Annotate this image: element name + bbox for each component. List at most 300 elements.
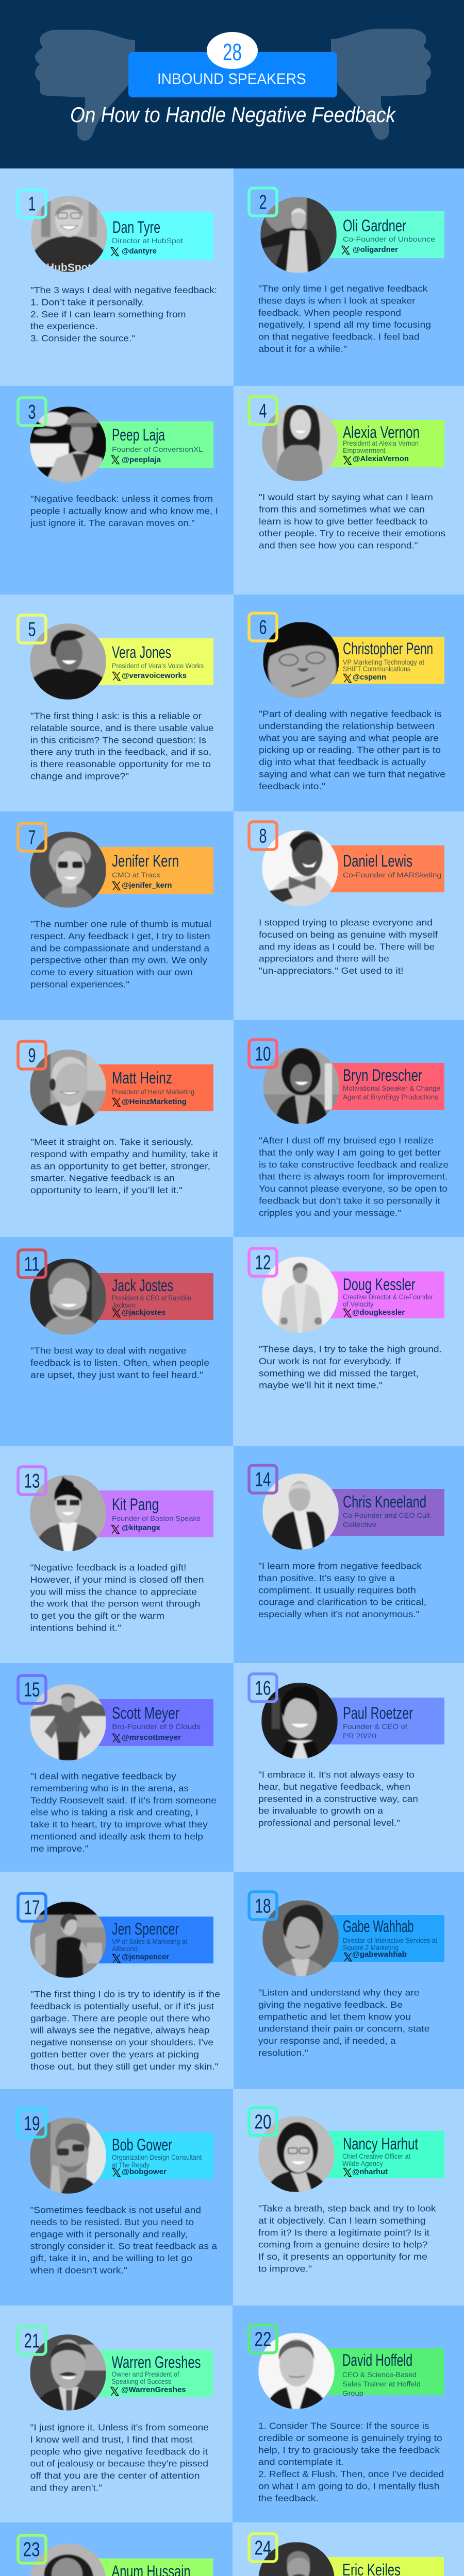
panel: card 1 Dan Tyre bbox=[0, 168, 234, 386]
panel: card 11 Jack Jostes bbox=[0, 1237, 234, 1446]
quote: me improve." bbox=[30, 1843, 89, 1854]
quote: people I actually know and who know me, I bbox=[30, 505, 218, 516]
quote: those out, but they still get under my skin." bbox=[30, 2061, 219, 2072]
quote: feedback into." bbox=[259, 781, 325, 791]
panel: card 15 Scott Meyer bbox=[0, 1663, 234, 1872]
job title: Bro-Founder of 9 Clouds bbox=[112, 1722, 201, 1731]
number badge: 13 bbox=[24, 1470, 40, 1492]
handle: @bobgower bbox=[122, 2167, 167, 2176]
portrait bbox=[263, 622, 339, 698]
job title: Founder of Boston Speaks bbox=[112, 1514, 201, 1522]
quote: on what I am going to do, I mentally flush bbox=[258, 2481, 439, 2492]
panel: card 12 Doug Kessler bbox=[233, 1237, 464, 1446]
quote bbox=[30, 1346, 209, 1380]
quote: as an opportunity to get better, stronger, bbox=[30, 1161, 210, 1171]
quote: "Sometimes feedback is not useful and bbox=[30, 2205, 201, 2215]
number badge: 12 bbox=[255, 1252, 271, 1274]
quote: take it to heart, try to improve what they bbox=[30, 1819, 208, 1829]
profile banner bbox=[325, 211, 444, 258]
quote: the experience. bbox=[30, 321, 98, 331]
job title bbox=[343, 1936, 437, 1952]
quote: when it doesn't work." bbox=[29, 2265, 127, 2275]
profile banner bbox=[322, 2348, 444, 2395]
job title bbox=[343, 1511, 430, 1529]
number badge: 22 bbox=[255, 2329, 271, 2350]
quote bbox=[258, 1561, 426, 1619]
portrait bbox=[30, 2544, 106, 2576]
name: Gabe Wahhab bbox=[343, 1917, 413, 1936]
name: Bob Gower bbox=[112, 2136, 172, 2154]
icon: X logo bbox=[343, 674, 351, 682]
quote: come to every situation with our own bbox=[30, 967, 193, 977]
number badge: 19 bbox=[24, 2112, 40, 2135]
name: Jen Spencer bbox=[112, 1920, 179, 1938]
number badge bbox=[249, 1040, 277, 1067]
quote: understanding the relationship between bbox=[259, 721, 435, 731]
number badge bbox=[249, 822, 277, 850]
portrait bbox=[31, 196, 107, 272]
quote: feedback. When people respond bbox=[258, 308, 401, 318]
number badge: 23 bbox=[23, 2539, 40, 2561]
quote: at it objectively. Can I learn something bbox=[258, 2215, 426, 2226]
quote: engage with it personally and really, bbox=[30, 2229, 188, 2239]
icon: thumbs down left bbox=[35, 30, 135, 141]
number badge: 8 bbox=[259, 825, 267, 847]
job title: at The Ready bbox=[112, 2161, 150, 2169]
job title bbox=[343, 658, 424, 673]
job title: President & CEO at Ramblin bbox=[112, 1294, 191, 1302]
name: Alexia Vernon bbox=[343, 423, 420, 442]
profile banner bbox=[98, 212, 213, 260]
icon: X logo bbox=[112, 882, 120, 890]
quote: "The number one rule of thumb is mutual bbox=[30, 919, 211, 929]
name: Jenifer Kern bbox=[112, 852, 179, 870]
handle: @dantyre bbox=[122, 247, 157, 256]
job title: Founder of ConversionXL bbox=[112, 445, 203, 453]
quote: and then see how you can respond." bbox=[259, 540, 418, 551]
quote: 1. Don’t take it personally. bbox=[30, 297, 144, 307]
handle: @cspenn bbox=[353, 673, 386, 682]
job title bbox=[343, 1084, 440, 1101]
icon: X logo bbox=[112, 1955, 120, 1963]
handle: @jenifer_kern bbox=[122, 881, 172, 890]
icon: X logo bbox=[111, 247, 119, 256]
quote: You cannot please everyone, so be open to bbox=[259, 1183, 448, 1194]
quote: to improve." bbox=[258, 2264, 312, 2274]
quote: to get you the gift or the warm bbox=[30, 1611, 164, 1621]
icon: X logo bbox=[344, 1953, 352, 1961]
number badge bbox=[249, 2108, 277, 2136]
quote: gift, take it in, and be willing to let go bbox=[30, 2253, 192, 2263]
quote: on that negative feedback. I feel bad bbox=[258, 332, 420, 342]
quote: "un-appreciators." Get used to it! bbox=[259, 965, 403, 976]
panel: card 3 Peep Laja bbox=[0, 386, 234, 595]
quote: feedback is potentially useful, or if it's just bbox=[30, 2001, 214, 2011]
title banner bbox=[128, 52, 337, 97]
icon: X logo bbox=[343, 2168, 351, 2176]
job title: Director of Interactive Services at bbox=[343, 1936, 437, 1944]
quote: respect. Any feedback I get, I try to listen bbox=[30, 931, 210, 941]
icon: X logo bbox=[112, 1309, 120, 1317]
name: Dan Tyre bbox=[112, 218, 160, 236]
number badge: 6 bbox=[259, 616, 267, 639]
profile banner bbox=[325, 420, 444, 467]
quote: personal experiences." bbox=[30, 979, 129, 989]
number badge bbox=[249, 613, 277, 641]
portrait bbox=[259, 2542, 334, 2576]
quote: opportunity to learn, if you’ll let it." bbox=[30, 1185, 183, 1195]
job title: Motivational Speaker & Change bbox=[343, 1084, 440, 1092]
job title bbox=[343, 439, 419, 454]
job title: Chief Creative Officer at bbox=[342, 2152, 410, 2160]
quote: courage and clarification to be critical, bbox=[258, 1597, 426, 1607]
handle: @peeplaja bbox=[122, 455, 161, 464]
job title bbox=[111, 2370, 179, 2385]
handle: @kitpangx bbox=[122, 1523, 161, 1532]
profile banner bbox=[98, 2350, 213, 2397]
number badge bbox=[18, 1041, 46, 1069]
quote: in this criticism? The second question: Is bbox=[30, 735, 206, 745]
quote: 2. See if I can learn something from bbox=[30, 309, 186, 319]
job title: SHIFT Communications bbox=[343, 665, 410, 673]
quote: compliment. It usually requires both bbox=[258, 1585, 416, 1595]
number badge: 7 bbox=[28, 826, 36, 849]
name: Kit Pang bbox=[112, 1495, 159, 1514]
quote: your response and, if needed, a bbox=[258, 2036, 396, 2046]
quote: will always see the negative, always heap bbox=[30, 2025, 209, 2036]
quote: "I just ignore it. Unless it's from someone bbox=[30, 2422, 209, 2433]
quote: "After I dust off my bruised ego I realize bbox=[259, 1136, 434, 1146]
handle: @jackjostes bbox=[122, 1308, 165, 1317]
portrait bbox=[258, 2333, 335, 2409]
number badge: 4 bbox=[259, 400, 267, 422]
number badge bbox=[249, 1892, 277, 1920]
number badge bbox=[249, 2534, 277, 2562]
panel: card 23 Anum Hussain bbox=[0, 2522, 233, 2576]
quote: else who is taking a risk and creating, I bbox=[30, 1807, 198, 1818]
quote: is to take constructive feedback and realize bbox=[259, 1159, 449, 1170]
job title: President at Alexia Vernon bbox=[343, 439, 419, 447]
icon: X logo bbox=[343, 1309, 351, 1317]
icon: X logo bbox=[112, 1734, 120, 1742]
job title: Creative Director & Co-Founder bbox=[343, 1293, 433, 1301]
job title: President of Vera's Voice Works bbox=[112, 662, 204, 670]
quote: "Take a breath, step back and try to look bbox=[258, 2203, 436, 2213]
panel: card 8 Daniel Lewis bbox=[234, 811, 464, 1020]
portrait bbox=[262, 1900, 339, 1976]
panel: card 4 Alexia Vernon bbox=[234, 386, 464, 595]
quote bbox=[30, 1771, 217, 1854]
quote: negative nonsense on your shoulders. I've bbox=[30, 2037, 213, 2047]
portrait bbox=[30, 406, 106, 483]
panel: card 5 Vera Jones bbox=[0, 595, 234, 811]
job title bbox=[112, 2153, 202, 2169]
number badge bbox=[249, 397, 277, 425]
portrait bbox=[30, 1902, 106, 1978]
job title: Founder & CEO of bbox=[343, 1722, 407, 1731]
panel: card 20 Nancy Harhut bbox=[233, 2089, 464, 2306]
icon: X logo bbox=[112, 1098, 120, 1107]
quote: there any truth in the feedback, and if so, bbox=[30, 747, 211, 757]
name: Chris Kneeland bbox=[343, 1493, 426, 1511]
quote: Teddy Roosevelt said. If it's from someone bbox=[30, 1795, 217, 1805]
handle: @mrscottmeyer bbox=[122, 1733, 181, 1742]
profile banner bbox=[98, 421, 213, 468]
panel: card 24 Eric Keiles bbox=[233, 2522, 464, 2576]
quote bbox=[30, 1989, 220, 2072]
title: On How to Handle Negative Feedback bbox=[70, 103, 396, 127]
portrait bbox=[263, 1048, 339, 1124]
number badge: 9 bbox=[28, 1045, 36, 1066]
profile banner bbox=[325, 637, 444, 684]
profile banner bbox=[325, 1489, 444, 1536]
quote: that there is always room for improvement. bbox=[259, 1172, 448, 1182]
quote: "I deal with negative feedback by bbox=[30, 1771, 176, 1782]
quote: other people. Try to receive their emotions bbox=[259, 528, 445, 538]
name: David Hoffeld bbox=[342, 2351, 412, 2369]
quote: are upset, they just want to feel heard." bbox=[30, 1369, 203, 1380]
icon: X logo bbox=[112, 672, 120, 680]
quote: than positive. It’s easy to give a bbox=[258, 1573, 395, 1583]
profile banner bbox=[98, 2558, 213, 2576]
profile banner bbox=[325, 1698, 444, 1744]
panel: card 9 Matt Heinz bbox=[0, 1020, 234, 1237]
job title: Wilde Agency bbox=[342, 2159, 383, 2167]
quote: learn is how to give better feedback to bbox=[259, 516, 428, 527]
quote: dig into what that feedback is actually bbox=[259, 757, 426, 767]
quote: garbage. There are people out there who bbox=[30, 2013, 210, 2023]
job title: CEO & Science-Based bbox=[342, 2370, 417, 2379]
number ellipse bbox=[207, 32, 258, 69]
name: Warren Greshes bbox=[111, 2353, 201, 2371]
name: Vera Jones bbox=[112, 643, 171, 662]
portrait bbox=[30, 832, 106, 908]
icon: X logo bbox=[343, 456, 351, 465]
name: Oli Gardner bbox=[343, 216, 406, 235]
portrait bbox=[30, 2334, 106, 2411]
number 28: 28 bbox=[223, 39, 242, 65]
job title: Organization Design Consultant bbox=[112, 2153, 202, 2161]
number badge: 10 bbox=[255, 1043, 271, 1065]
quote: the feedback. bbox=[258, 2493, 319, 2503]
number badge bbox=[18, 2535, 46, 2563]
quote bbox=[259, 917, 438, 976]
quote: intentions behind it." bbox=[30, 1623, 121, 1633]
quote bbox=[258, 1988, 430, 2058]
number badge bbox=[18, 398, 46, 426]
quote bbox=[30, 919, 211, 989]
quote: just ignore it. The caravan moves on." bbox=[30, 518, 195, 528]
job title: Speaking of Success bbox=[111, 2377, 171, 2385]
handle: @nharhut bbox=[352, 2167, 388, 2176]
quote: out of jealousy or because they're pissed bbox=[30, 2459, 208, 2469]
profile banner bbox=[98, 1490, 213, 1537]
profile banner bbox=[98, 847, 213, 894]
quote: be invaluable to growth on a bbox=[258, 1806, 383, 1816]
portrait bbox=[260, 197, 337, 273]
quote bbox=[30, 2422, 209, 2493]
job title bbox=[343, 1722, 407, 1740]
number badge: 14 bbox=[255, 1468, 271, 1491]
quote: maybe we'll hit it next time." bbox=[259, 1380, 383, 1391]
quote: "I would start by saying what can I learn bbox=[259, 492, 433, 502]
portrait bbox=[261, 1683, 338, 1759]
quote: remembering who is in the arena, as bbox=[30, 1783, 189, 1793]
quote: especially when it’s not anonymous." bbox=[258, 1609, 420, 1619]
quote: cripples you and your message." bbox=[259, 1208, 401, 1218]
quote: people who give negative feedback do it bbox=[30, 2446, 208, 2456]
quote bbox=[30, 285, 217, 344]
quote: needs to be resisted. But you need to bbox=[30, 2217, 194, 2227]
panel: card 17 Jen Spencer bbox=[0, 1872, 234, 2089]
number badge: 11 bbox=[24, 1253, 40, 1276]
quote: "The 3 ways I deal with negative feedback: bbox=[30, 285, 217, 295]
profile banner bbox=[325, 845, 444, 892]
number badge bbox=[18, 190, 46, 217]
profile banner bbox=[322, 2557, 444, 2576]
job title: VP of Sales & Marketing at bbox=[112, 1937, 187, 1945]
handle: @veravoiceworks bbox=[122, 671, 187, 680]
job title: Jackson bbox=[112, 1301, 135, 1309]
quote: I stopped trying to please everyone and bbox=[259, 917, 433, 927]
number badge bbox=[18, 823, 46, 851]
quote: focused on being as genuine with myself bbox=[259, 929, 438, 940]
quote: "I embrace it. It's not always easy to bbox=[258, 1769, 415, 1780]
quote bbox=[30, 711, 213, 781]
portrait bbox=[258, 2116, 335, 2192]
quote bbox=[258, 1769, 418, 1828]
number badge: 18 bbox=[255, 1895, 271, 1918]
panel: card 22 David Hoffeld bbox=[233, 2306, 464, 2522]
quote: from this and sometimes what we can bbox=[259, 504, 425, 514]
name: Nancy Harhut bbox=[343, 2134, 418, 2153]
quote: giving the negative feedback. Be bbox=[258, 1999, 403, 2010]
portrait bbox=[30, 2117, 106, 2194]
number badge bbox=[18, 1675, 46, 1703]
portrait bbox=[262, 830, 338, 906]
job title: of Velocity bbox=[343, 1300, 373, 1308]
job title: President of Heinz Marketing bbox=[112, 1088, 194, 1096]
job title: Collective bbox=[343, 1520, 376, 1529]
portrait bbox=[30, 1049, 106, 1126]
icon: X logo bbox=[112, 2168, 120, 2176]
job title: Co-Founder and CEO Cult bbox=[343, 1511, 430, 1519]
handle: @WarrenGreshes bbox=[121, 2385, 186, 2394]
quote: resolution." bbox=[258, 2047, 308, 2058]
quote: mentioned and ideally ask them to help bbox=[30, 1831, 203, 1841]
profile banner bbox=[98, 1699, 213, 1746]
quote: smarter. Negative feedback is an bbox=[30, 1173, 175, 1183]
quote: I know well and trust, I find that most bbox=[30, 2434, 193, 2445]
quote: 1. Consider The Source: If the source is bbox=[258, 2420, 429, 2431]
quote bbox=[259, 492, 445, 551]
profile banner bbox=[98, 638, 213, 685]
panel: card 18 Gabe Wahhab bbox=[234, 1872, 464, 2089]
name: Daniel Lewis bbox=[343, 852, 412, 870]
number badge bbox=[18, 2109, 46, 2137]
name: Jack Jostes bbox=[112, 1276, 173, 1295]
job title bbox=[342, 2370, 421, 2397]
profile banner bbox=[98, 1064, 213, 1111]
profile banner bbox=[325, 1063, 444, 1110]
number badge: 5 bbox=[28, 618, 36, 641]
number badge: 16 bbox=[255, 1677, 271, 1699]
number badge bbox=[249, 188, 277, 216]
job title: Allbound bbox=[112, 1944, 138, 1953]
icon: X logo bbox=[342, 246, 350, 255]
handle: @jenspencer bbox=[122, 1953, 169, 1961]
quote bbox=[259, 1136, 449, 1218]
quote: "Negative feedback: unless it comes from bbox=[30, 494, 213, 504]
number badge bbox=[18, 1893, 46, 1921]
panel: card 13 Kit Pang bbox=[0, 1446, 234, 1663]
quote: "The best way to deal with negative bbox=[30, 1346, 187, 1356]
quote bbox=[29, 2205, 217, 2275]
quote: "Negative feedback is a loaded gift! bbox=[30, 1562, 187, 1572]
job title: Square 2 Marketing bbox=[343, 1943, 399, 1952]
number badge bbox=[18, 2327, 46, 2354]
job title: Empowerment bbox=[343, 446, 386, 454]
quote: and be compassionate and understand a bbox=[30, 943, 209, 953]
quote: "I learn more from negative feedback bbox=[258, 1561, 422, 1571]
quote bbox=[258, 2420, 444, 2503]
profile banner bbox=[98, 2132, 213, 2179]
job title: PR 20/20 bbox=[343, 1732, 376, 1740]
number badge: 24 bbox=[255, 2537, 271, 2560]
profile banner bbox=[325, 1915, 444, 1962]
handle: @HeinzMarketing bbox=[122, 1097, 187, 1106]
panel: card 19 Bob Gower bbox=[0, 2089, 233, 2306]
job title: Agent at BrynErgy Productions bbox=[343, 1093, 438, 1101]
profile banner bbox=[98, 1273, 213, 1320]
subtitle: INBOUND SPEAKERS bbox=[157, 71, 306, 88]
number badge: 3 bbox=[28, 401, 36, 423]
quote: However, if your mind is closed off then bbox=[30, 1574, 204, 1585]
job title: Sales Trainer at Hoffeld bbox=[342, 2380, 421, 2388]
quote: understand their pain or concern, state bbox=[258, 2024, 430, 2034]
quote: 3. Consider the source." bbox=[30, 333, 135, 344]
name: Matt Heinz bbox=[112, 1069, 172, 1087]
portrait bbox=[262, 405, 338, 481]
quote: help, I try to graciously take the feedback bbox=[258, 2445, 440, 2455]
quote: negatively, I spend all my time focusing bbox=[258, 319, 431, 330]
job title: Owner and President of bbox=[111, 2370, 179, 2378]
name: Bryn Drescher bbox=[343, 1066, 422, 1084]
quote bbox=[30, 1562, 204, 1633]
number badge: 17 bbox=[24, 1897, 40, 1919]
portrait bbox=[30, 1684, 106, 1760]
profile banner bbox=[98, 1917, 213, 1963]
quote: what you are saying and what people are bbox=[258, 733, 439, 743]
quote: and contemplate it. bbox=[258, 2457, 343, 2467]
job title: CMO at Tracx bbox=[112, 871, 160, 879]
handle: @oligardner bbox=[353, 245, 398, 254]
number badge bbox=[18, 1467, 46, 1495]
quote: "Part of dealing with negative feedback is bbox=[259, 709, 442, 719]
icon: X logo bbox=[111, 2387, 119, 2396]
quote: professional and personal level." bbox=[258, 1818, 400, 1828]
panel: card 21 Warren Greshes bbox=[0, 2306, 233, 2522]
portrait bbox=[30, 623, 106, 700]
header panel bbox=[0, 0, 464, 168]
quote bbox=[258, 2203, 436, 2274]
quote bbox=[30, 1137, 218, 1195]
quote: and my ideas as I could be. There will be bbox=[259, 941, 435, 952]
number badge bbox=[249, 1465, 277, 1493]
quote: that the only way I am going to get better bbox=[259, 1147, 441, 1158]
quote: perspective other than my own. We only bbox=[30, 955, 207, 965]
quote: about it for a while." bbox=[258, 344, 347, 354]
